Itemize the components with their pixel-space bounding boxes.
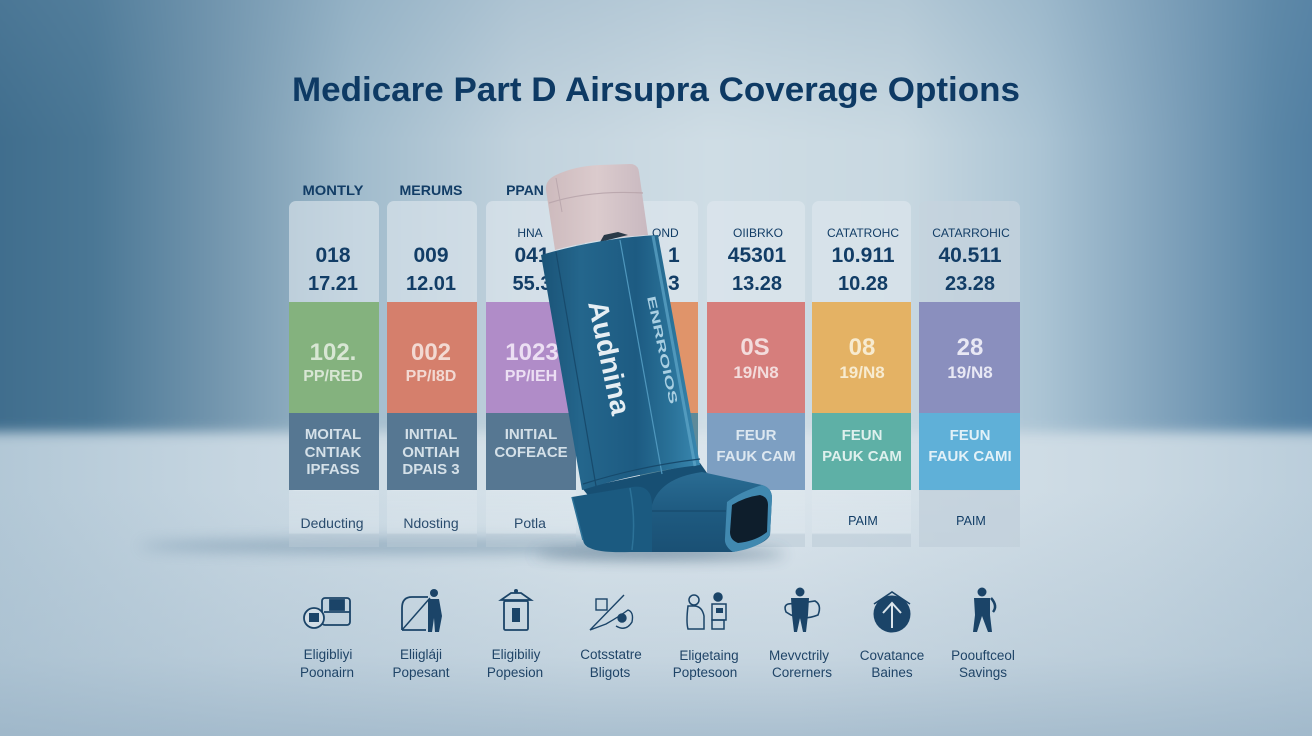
icon captions: Mevvctrily (769, 648, 829, 663)
panel: column 5: 19/N8 (733, 363, 779, 382)
panel: column 6 catastrophic: PAUK CAM (822, 448, 902, 465)
panel: column 7 catastrophic: 40.511 (938, 244, 1002, 267)
inhaler opening (730, 495, 768, 543)
panel: column 2 premiums: ONTIAH (402, 444, 460, 461)
icon captions: Eligibliyi (304, 647, 352, 662)
icon captions: Cotsstatre (580, 647, 642, 662)
panel: column 1 monthly: CNTIAK (305, 444, 361, 461)
panel: column 2 premiums: 002 (411, 339, 451, 366)
inhaler mouthpiece (652, 472, 772, 552)
panel: column 5 (707, 201, 805, 547)
inhaler shadow (535, 549, 785, 559)
icon captions: Baines (871, 665, 913, 680)
icon captions: Eligibiliy (492, 647, 541, 662)
panel: column 3 plan: Potla (514, 515, 546, 531)
panel: column 1 monthly: Deducting (300, 515, 364, 531)
panel: column 2 premiums: INITIAL (405, 426, 457, 443)
panel: column 3 plan: 1023 (505, 339, 559, 366)
panel: column 3 plan: 55.3 (513, 273, 551, 295)
panel: column 6 catastrophic: 19/N8 (839, 363, 885, 382)
panel: column 4 (behind inhaler): 3 (668, 272, 680, 295)
icon captions: Eliigláji (400, 647, 442, 662)
title: Medicare Part D Airsupra Coverage Options (292, 71, 1020, 109)
icon: people at desk (687, 593, 726, 629)
inhaler side text: ENRROIOS (644, 295, 681, 405)
panel: column 7 catastrophic: 28 (957, 334, 983, 361)
panel: column 6 catastrophic: 10.911 (831, 244, 895, 267)
panel: column 5: 45301 (728, 244, 787, 267)
icon: eligibility bag (304, 598, 350, 628)
panel: column 2 premiums: DPAIS 3 (402, 461, 460, 478)
icon: cost tools (590, 595, 632, 630)
panel: column 3 plan: HNA (517, 226, 543, 240)
inhaler cap (546, 164, 648, 250)
panel: column 2 premiums: 12.01 (406, 273, 456, 295)
panel: column 6 catastrophic: 08 (849, 334, 875, 361)
icon captions: Eligetaing (679, 648, 739, 663)
panel: column 1 monthly: MOITAL (305, 426, 361, 443)
icon captions: Savings (959, 665, 1007, 680)
panel: column 4 (behind inhaler): OND (652, 226, 679, 240)
icon: person savings (973, 588, 995, 632)
panel: column 5: 0S (740, 334, 770, 361)
panel: column 2 premiums: Ndosting (403, 515, 459, 531)
inhaler brand text: Audnina (582, 298, 637, 418)
panel: column 7 catastrophic: 19/N8 (947, 363, 993, 382)
inhaler base block (572, 463, 712, 552)
column headings: MERUMS (400, 182, 462, 198)
panel: column 2 premiums: 009 (413, 244, 449, 267)
panel: column 5: FEUR (736, 427, 777, 444)
icon captions: Corerners (772, 665, 832, 680)
panel: column 3 plan: PP/IEH (505, 368, 557, 385)
panel: column 3 plan (486, 201, 576, 547)
panel: column 2 premiums (387, 201, 477, 547)
panel: column 7 catastrophic: FEUN (950, 427, 990, 444)
icon: container (501, 589, 531, 630)
icon captions: Covatance (860, 648, 924, 663)
panel: column 4 (behind inhaler): 1 (668, 244, 680, 267)
column headings: PPAN (506, 182, 544, 198)
panel: column 1 monthly: IPFASS (306, 461, 360, 478)
icon captions: Popesion (487, 665, 543, 680)
icon: person with case (402, 589, 442, 632)
panel: column 6 catastrophic: PAIM (848, 514, 878, 528)
panel: column 7 catastrophic: 23.28 (945, 273, 995, 295)
panel: column 1 monthly: 102. (310, 339, 356, 366)
icon captions: Poptesoon (673, 665, 737, 680)
icon captions: Poonairn (300, 665, 354, 680)
panel: column 6 catastrophic (812, 201, 911, 547)
panel: column 3 plan: 041 (514, 244, 550, 267)
illustration: inhaler (541, 164, 772, 552)
inhaler body (541, 235, 700, 490)
column headings: MONTLY (302, 182, 364, 198)
icon: coverage arrow badge (874, 592, 910, 632)
icon captions: Popesant (392, 665, 450, 680)
icon captions: Poouftceol (951, 648, 1015, 663)
panel: column 6 catastrophic: CATATROHC (827, 226, 899, 240)
panel: column 3 plan: COFEACE (494, 444, 568, 461)
panel: column 1 monthly: 17.21 (308, 273, 358, 295)
panel: column 3 plan: INITIAL (505, 426, 557, 443)
icon captions (300, 647, 1015, 680)
panel: column 7 catastrophic: CATARROHIC (932, 226, 1010, 240)
column headings (302, 182, 544, 198)
panel: column 7 catastrophic: FAUK CAMI (928, 448, 1012, 465)
panel: column 2 premiums: PP/I8D (406, 368, 456, 385)
panel: column 6 catastrophic: FEUN (842, 427, 882, 444)
panel: column 7 catastrophic: PAIM (956, 514, 986, 528)
panel: column 4 (behind inhaler) (585, 201, 698, 547)
shadow under table (140, 539, 720, 553)
panel: column 1 monthly: 018 (315, 244, 351, 267)
panel: column 1 monthly (289, 201, 379, 547)
panel: column 1 monthly: PP/RED (303, 368, 363, 385)
panel: column 6 catastrophic: 10.28 (838, 273, 888, 295)
panel: column 5: FAUK CAM (716, 448, 796, 465)
panel: column 5: 13.28 (732, 273, 782, 295)
icon: person with cloud (785, 588, 819, 632)
icon captions: Bligots (590, 665, 631, 680)
panel: column 7 catastrophic (919, 201, 1020, 547)
panel: column 5: OIIBRKO (733, 226, 783, 240)
